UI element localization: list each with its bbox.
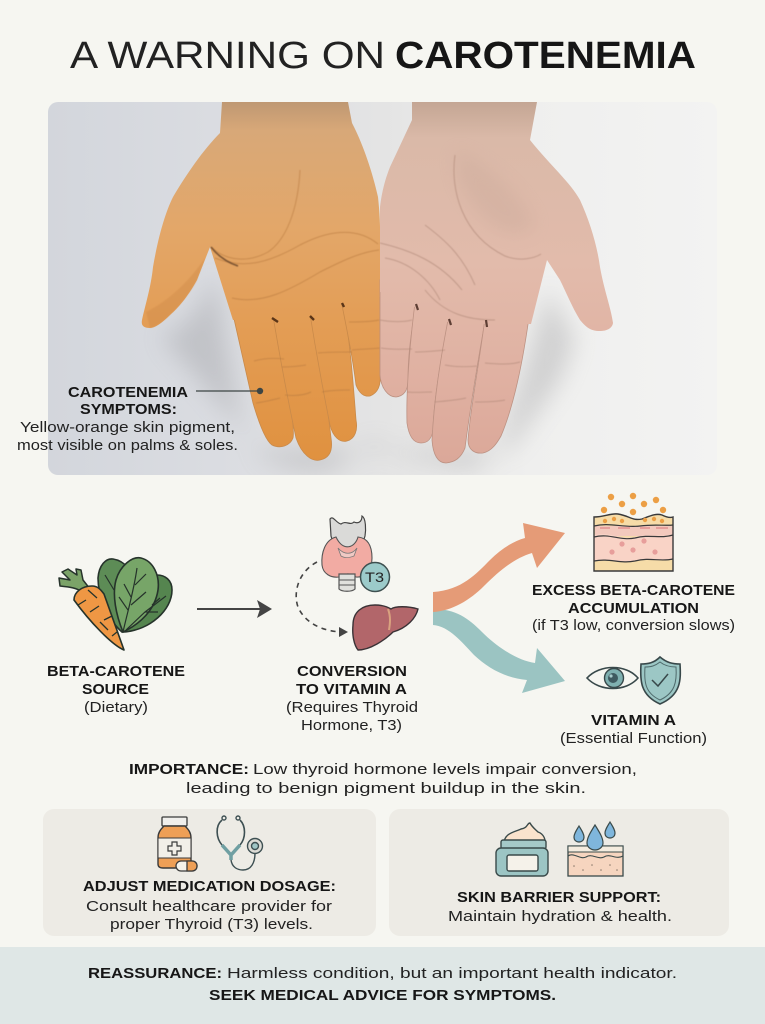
arrow: source to conversion bbox=[197, 600, 272, 618]
text: excess beta-carotene accumulation: ACCUMULATION bbox=[568, 600, 699, 617]
left thumb shade bbox=[148, 262, 203, 328]
text: vitamin A bbox=[560, 712, 707, 747]
icon: cream jar bbox=[496, 823, 548, 876]
callout: carotenemia symptoms: Yellow-orange skin pigment, bbox=[20, 419, 235, 436]
left hand creases bbox=[212, 170, 380, 403]
right finger base notches bbox=[416, 304, 487, 327]
text: conversion to vitamin A: CONVERSION bbox=[297, 663, 407, 680]
icon: carrot and spinach bbox=[59, 558, 172, 650]
dashed feedback arrow bbox=[296, 562, 348, 637]
callout: carotenemia symptoms: CAROTENEMIA bbox=[68, 384, 188, 401]
text: importance statement: IMPORTANCE: bbox=[129, 761, 249, 778]
text: beta-carotene source bbox=[47, 663, 185, 716]
hand shadows bbox=[160, 275, 575, 470]
right hand creases bbox=[380, 155, 541, 402]
text: conversion to vitamin A: TO VITAMIN A bbox=[296, 681, 407, 698]
text: importance statement bbox=[129, 761, 637, 797]
panel text bbox=[83, 878, 336, 933]
callout: carotenemia symptoms: SYMPTOMS: bbox=[80, 401, 177, 418]
title bbox=[70, 35, 696, 77]
left hand: orange carotenemia palm bbox=[142, 102, 380, 460]
text: excess beta-carotene accumulation bbox=[532, 582, 735, 634]
pigment dots bbox=[601, 493, 666, 515]
left finger base notches bbox=[272, 303, 344, 322]
right wrist shade bbox=[490, 203, 514, 220]
text: excess beta-carotene accumulation: (if T3 low, conversion slows) bbox=[532, 617, 735, 634]
shield bbox=[641, 657, 680, 704]
icon: water drops over skin bbox=[568, 822, 623, 876]
arrow: teal to vitamin A bbox=[433, 609, 565, 693]
carrot body bbox=[74, 586, 124, 650]
panel: hands photo comparison bbox=[48, 102, 613, 475]
panel text: ADJUST MEDICATION DOSAGE: bbox=[83, 878, 336, 895]
panel text: Maintain hydration & health. bbox=[448, 908, 672, 925]
panel text: proper Thyroid (T3) levels. bbox=[110, 916, 313, 933]
text: conversion to vitamin A: Hormone, T3) bbox=[301, 717, 402, 734]
icon: skin with pigment accumulation bbox=[594, 493, 673, 571]
right hand: normal palm bbox=[380, 102, 613, 463]
icon: thyroid and liver conversion bbox=[296, 516, 418, 650]
icon: stethoscope bbox=[217, 816, 262, 870]
trachea cylinder bbox=[339, 574, 355, 591]
text: importance statement: leading to benign pigment buildup in the skin. bbox=[186, 780, 586, 797]
eye bbox=[587, 668, 638, 688]
carrot tops bbox=[59, 569, 90, 592]
skin layers bbox=[594, 514, 673, 571]
text: conversion to vitamin A: (Requires Thyroid bbox=[286, 699, 418, 716]
thyroid gray cartilage bbox=[330, 516, 366, 552]
footer band: reassurance: Harmless condition, but an important health indicator. bbox=[227, 965, 677, 982]
right palm and thumb bbox=[380, 102, 613, 331]
callout leader line bbox=[196, 388, 263, 394]
thyroid pink lobes bbox=[322, 537, 372, 577]
title: CAROTENEMIA bbox=[395, 35, 696, 77]
T3 badge: T3 bbox=[365, 569, 384, 585]
icon: eye and shield bbox=[587, 657, 680, 704]
text: beta-carotene source: SOURCE bbox=[82, 681, 149, 698]
icon: medicine bottle bbox=[158, 817, 191, 868]
footer band: reassurance: SEEK MEDICAL ADVICE FOR SYMPTOMS. bbox=[209, 987, 556, 1004]
right fingers bbox=[380, 280, 417, 397]
footer band: reassurance bbox=[0, 947, 765, 1024]
panel text bbox=[448, 889, 672, 925]
panel: adjust medication dosage bbox=[43, 809, 376, 936]
panel text: SKIN BARRIER SUPPORT: bbox=[457, 889, 661, 906]
liver bbox=[353, 605, 418, 650]
panel text: Consult healthcare provider for bbox=[86, 898, 332, 915]
text: excess beta-carotene accumulation: EXCESS BETA-CAROTENE bbox=[532, 582, 735, 599]
text: beta-carotene source: BETA-CAROTENE bbox=[47, 663, 185, 680]
footer band: reassurance: REASSURANCE: bbox=[88, 965, 222, 982]
left palm and thumb bbox=[142, 102, 380, 328]
title: A WARNING ON bbox=[70, 35, 385, 77]
text: conversion to vitamin A bbox=[286, 663, 418, 734]
embedded dots bbox=[603, 517, 664, 523]
callout: carotenemia symptoms: most visible on palms & soles. bbox=[17, 437, 238, 454]
text: importance statement: Low thyroid hormone levels impair conversion, bbox=[253, 761, 637, 778]
text: vitamin A: VITAMIN A bbox=[591, 712, 676, 729]
spinach leaves bbox=[98, 558, 172, 632]
text: beta-carotene source: (Dietary) bbox=[84, 699, 148, 716]
arrow: orange to excess accumulation bbox=[433, 523, 565, 612]
icon: pill bbox=[176, 861, 197, 871]
left fingers bbox=[232, 310, 293, 447]
callout: carotenemia symptoms bbox=[17, 384, 263, 454]
panel: skin barrier support bbox=[389, 809, 729, 936]
text: vitamin A: (Essential Function) bbox=[560, 730, 707, 747]
